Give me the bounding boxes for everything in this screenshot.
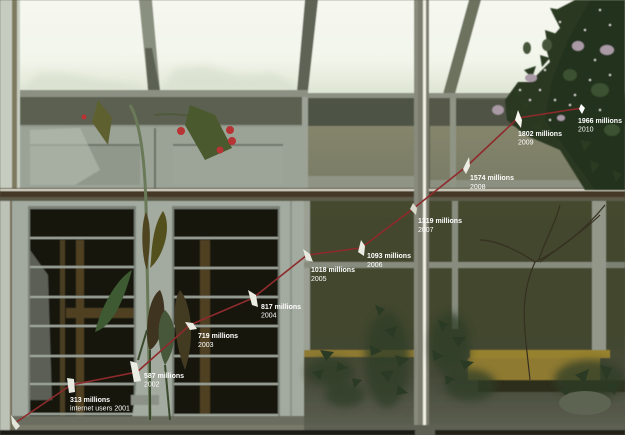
data point: 2009: 2009: [518, 140, 534, 146]
data point: 2006: [358, 240, 411, 269]
data point: 2003: 719 millions: [198, 333, 238, 340]
data point: 2004: 817 millions: [261, 304, 301, 311]
upper right olive glass: [302, 97, 308, 190]
vertical column: [414, 0, 429, 435]
marker: start: [11, 415, 20, 430]
data point: 2001: 313 millions: [70, 397, 110, 404]
bottom ledge: [12, 416, 304, 425]
left wall: [0, 0, 14, 435]
data point: 2001: internet users 2001: [70, 406, 130, 412]
data point: 2009: 1802 millions: [518, 131, 562, 138]
data point: 2003: 2003: [198, 342, 214, 349]
data point: 2004: 2004: [261, 312, 277, 320]
sky through upper glass: [18, 0, 625, 93]
data point: 2001: [67, 378, 130, 412]
data point: 2009: [515, 110, 562, 146]
data point: 2010: 2010: [578, 126, 594, 134]
data point: 2003: [185, 322, 238, 349]
lower right dark glass: [304, 201, 415, 425]
window left: [30, 209, 134, 416]
roof beams: [139, 0, 160, 90]
plant: tree at top right: [492, 0, 625, 190]
data point: 2004: [248, 290, 301, 320]
lower doors: [12, 201, 304, 425]
data point: 2006: 1093 millions: [367, 253, 411, 260]
data point: 2007: 2007: [418, 227, 434, 234]
data point: 2010: 1966 millions: [578, 118, 622, 125]
data point: 2007: 1319 millions: [418, 218, 462, 225]
horizontal beam: [0, 188, 625, 201]
data point: 2002: 587 millions: [144, 373, 184, 380]
plants in lower right glass: [306, 205, 625, 415]
data point: 2007: [410, 203, 462, 234]
data point: 2002: [130, 361, 184, 388]
upper doors: [15, 127, 302, 188]
data point: 2006: 2006: [367, 262, 383, 269]
data point: 2005: 1018 millions: [311, 267, 355, 274]
data point: 2005: 2005: [311, 276, 327, 283]
red trend line: [15, 108, 582, 423]
yellow beam: [304, 350, 415, 375]
data point: 2008: 2008: [470, 184, 486, 191]
data point: 2008: 1574 millions: [470, 175, 514, 182]
window right: [174, 209, 278, 416]
upper dark band: [18, 92, 308, 126]
data point: 2010: [578, 104, 622, 134]
data point: 2005: [303, 249, 355, 283]
data point: 2008: [463, 157, 514, 191]
line chart: internet users 2001 to 2010: [11, 104, 622, 430]
plant: creeper with red berries in centre: [82, 100, 236, 420]
window bars: [30, 237, 278, 416]
data point: 2002: 2002: [144, 382, 160, 388]
